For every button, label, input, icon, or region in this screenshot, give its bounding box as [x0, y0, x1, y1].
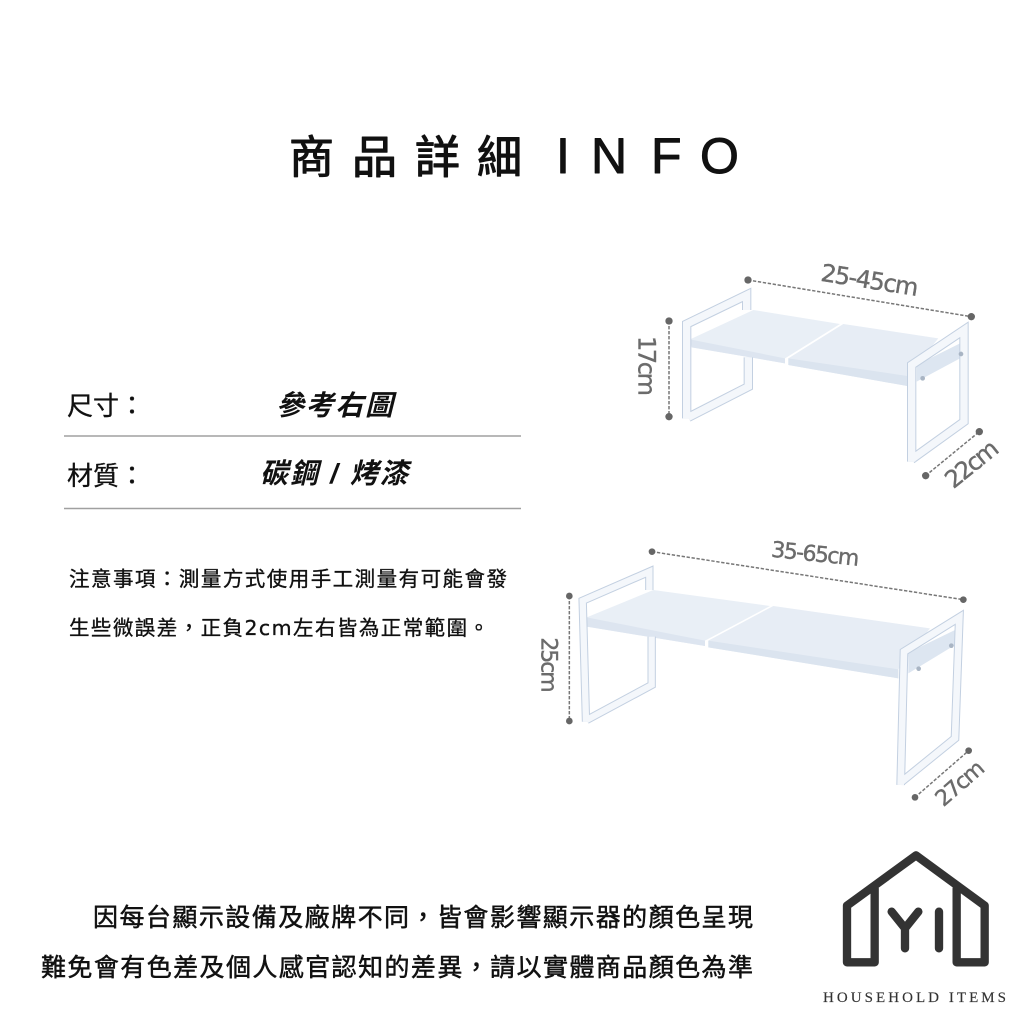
logo icon: house with YI — [847, 855, 985, 962]
dimension: width — [744, 259, 975, 320]
dimension: width: 35-65cm — [770, 538, 860, 572]
left frame — [583, 572, 652, 722]
size label: 尺寸： — [67, 391, 145, 421]
dimension: depth — [912, 747, 990, 812]
material label: 材質： — [67, 461, 145, 491]
title: INFO — [556, 128, 739, 184]
notes text block — [69, 568, 507, 641]
dimension: width: 25-45cm — [819, 259, 921, 302]
dimension: height — [536, 593, 573, 724]
dimension: width — [649, 538, 967, 603]
notes text block: 生些微誤差，正負2cm左右皆為正常範圍。 — [69, 611, 489, 641]
shelf board — [690, 310, 938, 386]
shelf diagram: large — [536, 538, 990, 812]
bottom disclaimer: 難免會有色差及個人感官認知的差異，請以實體商品顏色為準 — [41, 948, 753, 984]
right frame — [901, 617, 959, 785]
dimension: height — [632, 317, 673, 420]
bottom disclaimer: 因每台顯示設備及廠牌不同，皆會影響顯示器的顏色呈現 — [93, 898, 753, 934]
right frame — [912, 330, 964, 462]
dimension: depth: 22cm — [939, 434, 1004, 494]
dimension: height: 17cm — [632, 336, 660, 396]
logo wordmark: HOUSEHOLD ITEMS — [823, 990, 1006, 1006]
notes text block: 注意事項：測量方式使用手工測量有可能會發 — [69, 568, 507, 591]
title — [289, 128, 739, 184]
title: 商品詳細 — [289, 132, 522, 183]
material value: 碳鋼 / 烤漆 — [260, 458, 412, 489]
size value: 參考右圖 — [276, 390, 397, 421]
left frame — [687, 295, 748, 418]
dimension: height: 25cm — [536, 637, 561, 693]
panel: specifications — [64, 390, 521, 508]
logo — [823, 855, 1006, 1006]
bottom disclaimer — [41, 898, 753, 984]
shelf board — [587, 590, 930, 678]
dimension: depth: 27cm — [931, 756, 990, 812]
shelf diagram: small — [632, 259, 1004, 494]
